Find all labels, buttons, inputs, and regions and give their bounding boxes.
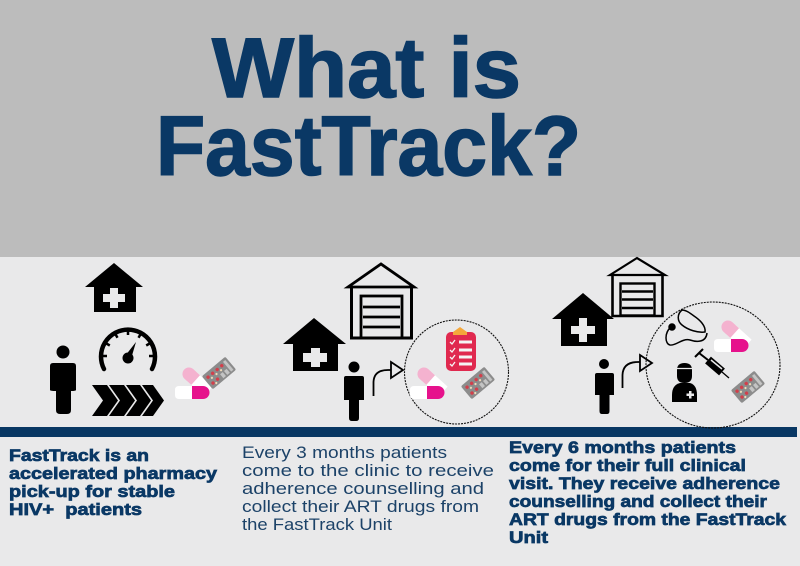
arrow xyxy=(622,355,652,388)
icon: blister pack xyxy=(202,357,236,389)
icon: clinic house xyxy=(85,263,143,312)
icon: capsules xyxy=(410,365,448,399)
lower panel background xyxy=(0,257,800,566)
icon: person xyxy=(595,359,614,414)
text block: every 3 months: collect their ART drugs from xyxy=(242,497,479,516)
text block: every 6 months: ART drugs from the FastTrack xyxy=(509,510,787,529)
text block: every 6 months: counselling and collect their xyxy=(509,492,767,511)
text block: every 3 months: Every 3 months patients xyxy=(242,443,447,462)
text block: FastTrack definition: FastTrack is an xyxy=(9,446,149,465)
icon: clinic house xyxy=(552,293,614,346)
title xyxy=(156,21,581,193)
arrow xyxy=(374,362,403,396)
icon: clinic house xyxy=(283,318,346,371)
text block: every 6 months: Every 6 months patients xyxy=(509,438,736,457)
text block: every 3 months: adherence counselling and xyxy=(242,479,484,498)
dashed circle xyxy=(404,320,508,424)
icon: blister pack xyxy=(461,367,495,399)
dashed circle xyxy=(646,302,780,428)
icon: capsules xyxy=(175,365,213,399)
panel: six-month visit icons xyxy=(552,258,780,428)
icon: stethoscope xyxy=(666,310,707,345)
title: What is xyxy=(212,21,521,115)
icon: blister pack xyxy=(731,371,765,403)
text block: every 3 months: come to the clinic to receive xyxy=(242,461,494,480)
text block: every 6 months: visit. They receive adherence xyxy=(509,474,780,493)
divider bar xyxy=(0,427,797,437)
text block: every 3 months: the FastTrack Unit xyxy=(242,515,392,534)
icon: chevrons xyxy=(92,385,164,416)
text block: FastTrack definition: accelerated pharmacy xyxy=(9,464,218,483)
text block: every 6 months xyxy=(509,438,787,547)
text block: every 6 months: Unit xyxy=(509,528,548,547)
icon: syringe xyxy=(695,349,729,378)
icon: person xyxy=(344,362,364,421)
panel: three-month visit icons xyxy=(283,264,508,424)
icon: clipboard checklist xyxy=(446,327,476,371)
icon: person xyxy=(50,346,76,414)
text block: FastTrack definition xyxy=(9,446,218,519)
header band xyxy=(0,0,800,257)
text block: every 6 months: come for their full clinical xyxy=(509,456,746,475)
icon: doctor xyxy=(672,363,697,402)
text block: FastTrack definition: HIV+ patients xyxy=(9,500,142,519)
icon: speedometer xyxy=(101,329,155,369)
text block: every 3 months xyxy=(242,443,494,534)
icon: capsules xyxy=(714,318,752,352)
title: FastTrack? xyxy=(156,99,581,193)
panel: accelerated pick-up icons xyxy=(50,263,236,416)
text block: FastTrack definition: pick-up for stable xyxy=(9,482,175,501)
icon: garage unit xyxy=(348,264,414,338)
icon: garage unit xyxy=(610,258,665,316)
